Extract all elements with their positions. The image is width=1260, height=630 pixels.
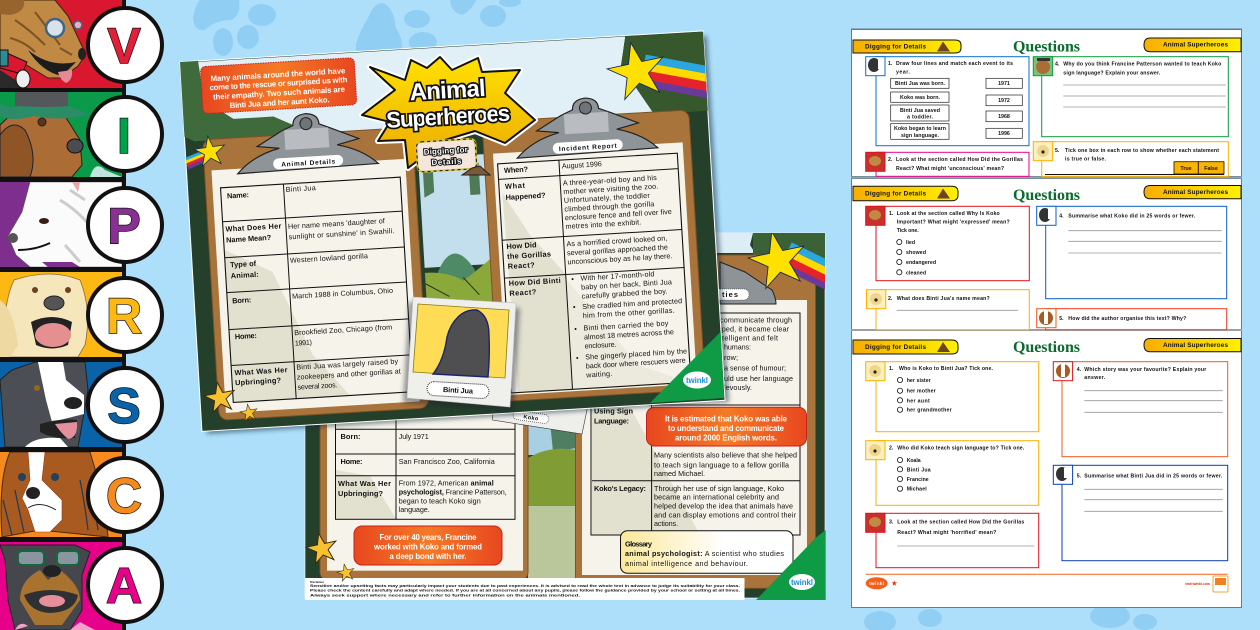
right clipboard <box>481 92 705 402</box>
question 1 matching: sign language. <box>901 133 940 139</box>
intro callout: Binti Jua and her aunt Koko. <box>229 95 330 110</box>
callout: 2000 words <box>646 407 806 446</box>
callout: Francine: a deep bond with her. <box>390 552 466 561</box>
intro callout: their empathy. Two such animals are <box>213 85 346 102</box>
table: incident report: baby on her back, Binti Jua <box>581 277 672 292</box>
question 3: 3. <box>889 520 894 526</box>
rear right clipboard: uld use her language <box>724 374 793 383</box>
table: animal details: Home: <box>235 331 257 341</box>
header: Digging for Details <box>865 344 926 351</box>
question 2: 2. <box>889 446 894 452</box>
rear right clipboard: to teach sign language to a fellow gorilla <box>654 460 789 470</box>
disclaimer strip: Disclaimer <box>310 580 325 584</box>
question 1: showed <box>906 250 926 256</box>
glossary box: animal psychologist: A scientist who studies <box>625 549 784 558</box>
question 1 matching: 1971 <box>998 81 1010 87</box>
table: incident report: Binti then carried the boy <box>583 318 669 333</box>
table: incident report: With her 17-month-old <box>580 269 655 283</box>
question 5: 5. <box>1077 474 1082 480</box>
band A: pink with rottweiler <box>0 542 122 630</box>
question 2 <box>866 152 1029 176</box>
letter circle A: A <box>106 558 142 614</box>
rear right clipboard: levously. <box>724 383 752 392</box>
table: animal details: several zoos. <box>297 380 338 392</box>
letter circle R: R <box>106 288 142 344</box>
question 1: her mother <box>907 389 936 395</box>
question 2: Koala <box>907 458 921 464</box>
question 2: Francine <box>907 477 929 483</box>
rear left clipboard: What Was Her <box>338 479 391 488</box>
question 5: Summarise what Binti Jua did in 25 words or fewer. <box>1084 474 1223 480</box>
band V: red with airedale <box>0 0 122 88</box>
table: incident report: She cradled him and protected <box>582 296 682 311</box>
title: Superheroes <box>386 101 511 133</box>
question 1 matching: a toddler. <box>907 114 934 120</box>
table: incident report: What <box>505 181 526 191</box>
title: Animal <box>409 75 486 106</box>
rear left clipboard: language. <box>399 505 430 514</box>
footer: twinkl <box>869 581 884 586</box>
band P: purple with white dog <box>0 182 122 267</box>
letter circle C: C <box>106 468 142 524</box>
table: animal details: 1991) <box>295 338 312 348</box>
question 1: Tick one. <box>897 228 919 234</box>
table: animal details: zookeepers and other gorillas at <box>297 366 401 382</box>
table: incident report: A three-year-old boy and his <box>563 173 657 187</box>
question 1 <box>866 206 1029 281</box>
question 4: answer. <box>1084 375 1106 381</box>
question 1: endangered <box>906 260 936 266</box>
table: animal details: Name Mean? <box>226 233 272 245</box>
table: incident report: When? <box>504 165 529 175</box>
table: animal details: Western lowland gorilla <box>290 251 368 265</box>
header: Questions <box>1013 187 1080 204</box>
band S: blue with collie <box>0 362 122 447</box>
rear left clipboard: July 1971 <box>399 432 429 441</box>
question 2: React? What might 'unconscious' mean? <box>896 166 1004 172</box>
badge: Digging for Details <box>416 139 477 172</box>
Koko polaroid fragment <box>491 395 590 434</box>
VIPRSCA dog strip <box>0 0 162 630</box>
question 1: her aunt <box>907 398 930 404</box>
clip: animal details <box>234 110 378 174</box>
question 1 matching: 1996 <box>998 131 1010 137</box>
title starburst <box>362 57 535 168</box>
table: incident report: the Gorillas <box>507 249 551 261</box>
label: Abilities tab <box>705 289 749 300</box>
question 4: Why do you think Francine Patterson wanted to teach Koko <box>1063 62 1221 68</box>
letter circle P: P <box>107 198 141 254</box>
rear right clipboard: Many scientists also believe that she helped <box>654 450 797 460</box>
table: animal details: Her name means 'daughter of <box>288 216 385 231</box>
table: animal details <box>221 177 413 402</box>
header: Animal Superheroes <box>1163 42 1228 48</box>
question 1: cleaned <box>906 270 926 276</box>
table: animal details: Binti Jua <box>285 183 316 194</box>
header <box>853 38 1241 56</box>
twinkl corner (front) <box>650 332 724 403</box>
disclaimer strip: Always seek support where necessary and refer to further information on the animals mentioned. <box>310 594 580 598</box>
question 2 <box>866 441 1039 505</box>
callout: Francine <box>354 526 502 565</box>
rear right clipboard: Language: <box>594 416 629 426</box>
footer <box>866 574 1228 592</box>
glossary box: animal intelligence and behaviour. <box>625 559 748 568</box>
question 2 <box>866 290 1029 330</box>
letter circle R <box>88 278 162 352</box>
Koko polaroid fragment: Koko <box>523 414 539 423</box>
footer: visit twinkl.com <box>1185 582 1210 586</box>
question 1 matching: Koko was born. <box>900 95 941 101</box>
question 1 matching: Draw four lines and match each event to its <box>896 61 1013 67</box>
icon: rock <box>462 166 490 175</box>
badge: Digging for Details: Digging for <box>424 145 468 157</box>
callout: Francine: For over 40 years, Francine <box>380 533 477 542</box>
band I: green with bloodhound <box>0 92 122 177</box>
question 2: Michael <box>907 487 927 493</box>
rear left clipboard <box>320 380 528 582</box>
letter circle S <box>88 368 162 442</box>
table: incident report: several gorillas approached the <box>567 242 668 257</box>
table: incident report: mother were visiting the zoo. <box>563 182 658 196</box>
question 4 <box>1053 362 1228 457</box>
rear right clipboard: Through her use of sign language, Koko <box>654 484 784 493</box>
rear right clipboard: named Michael. <box>654 469 705 478</box>
question 2: Who did Koko teach sign language to? Tick one. <box>897 446 1025 452</box>
rear left clipboard: Upbringing? <box>338 489 383 498</box>
callout: 2000 words: to understand and communicate <box>668 424 785 433</box>
question 4 <box>1033 57 1228 137</box>
table: animal details: Name: <box>227 190 249 200</box>
letter circle P <box>88 188 162 262</box>
table: incident report: back door where rescuers were <box>585 356 686 370</box>
table: incident report: August 1996 <box>562 159 602 171</box>
table: incident report: She gingerly placed him by the <box>585 346 687 361</box>
callout: 2000 words: It is estimated that Koko was able <box>665 414 788 424</box>
question 1 matching: Binti Jua was born. <box>895 81 946 87</box>
disclaimer strip: Please check the content carefully and adapt where needed. If you are at all concerned about any pupils, please follow the guidance provided by your school or setting at all times. <box>310 588 740 592</box>
table: incident report: enclosure fence and fell over five <box>565 207 672 222</box>
rear left clipboard: Home: <box>340 457 362 466</box>
twinkl corner (rear) <box>756 530 826 600</box>
table: incident report: him from the other gorillas. <box>582 306 675 320</box>
question 4: 4. <box>1077 367 1082 373</box>
table: incident report: How Did <box>506 240 537 251</box>
rear right clipboard <box>576 255 816 588</box>
question 5: is true or false. <box>1065 156 1107 162</box>
rear left clipboard: From 1972, American animal <box>399 478 494 488</box>
question 4: 4. <box>1055 62 1060 68</box>
question 1 matching: Binti Jua saved <box>900 108 940 114</box>
disclaimer strip <box>305 578 744 600</box>
letter circle I: I <box>117 108 131 164</box>
middle scenery <box>418 154 493 310</box>
question 5: 5. <box>1055 148 1060 154</box>
panel: Binti Jua poster (front) <box>180 31 725 431</box>
question 1: Look at the section called Why Is Koko <box>897 211 1000 217</box>
question 5: True <box>1180 166 1192 172</box>
question 2: Binti Jua <box>907 467 931 473</box>
worksheet 3 (bottom) <box>851 330 1242 608</box>
rear right clipboard: a sense of humour; <box>724 364 786 372</box>
clip: animal details: Animal Details <box>281 158 336 169</box>
icon: top-right rainbow star <box>606 42 707 101</box>
header: Animal Superheroes <box>1163 189 1228 196</box>
question 1 matching <box>866 57 1029 146</box>
icon: rear orange stars <box>304 530 356 582</box>
question 3 <box>866 513 1039 568</box>
callout: 2000 words: around 2000 English words. <box>675 434 777 442</box>
paw print pattern <box>193 0 1157 630</box>
table: incident report: almost 18 metres across the <box>584 327 674 342</box>
letter circle A <box>88 548 162 622</box>
question 5: False <box>1204 166 1218 172</box>
rear right clipboard: Using Sign <box>594 406 633 416</box>
question 3: React? What might 'horrified' mean? <box>897 530 996 536</box>
question 1: Who is Koko to Binti Jua? Tick one. <box>899 366 994 372</box>
table: animal details: Born: <box>232 295 251 305</box>
rear right clipboard: Koko's Legacy: <box>594 484 646 493</box>
intro callout: Many animals around the world have <box>210 66 346 83</box>
glossary box <box>620 531 793 573</box>
question 5: How did the author organise this text? Why? <box>1068 316 1186 322</box>
header: Questions <box>1013 38 1080 56</box>
question 1: her grandmother <box>907 408 952 414</box>
clip: incident report <box>514 94 658 158</box>
question 4: 4. <box>1059 213 1064 219</box>
header <box>853 186 1241 204</box>
question 1 matching: year. <box>896 70 911 76</box>
question 5 <box>1053 465 1228 561</box>
table: incident report: Happened? <box>505 191 546 202</box>
question 4: Summarise what Koko did in 25 words or fewer. <box>1068 213 1196 219</box>
question 2: 2. <box>888 296 893 302</box>
question 1: 1. <box>889 211 894 217</box>
twinkl corner (rear): twinkl <box>791 578 813 587</box>
rear left clipboard: psychologist, Francine Patterson, <box>399 488 507 496</box>
icon: rear rainbow star <box>746 233 825 290</box>
table: animal details: Type of <box>230 259 257 269</box>
table: incident report: metres into the exhibit. <box>565 217 642 231</box>
left clipboard <box>201 107 429 420</box>
black spine <box>122 0 126 630</box>
rear right clipboard: helped develop the idea that animals have <box>654 502 793 510</box>
question 1: lied <box>906 240 915 246</box>
letter circle V <box>88 8 162 82</box>
polaroid: Binti Jua: Binti Jua <box>443 385 474 396</box>
band C: orange with spaniel <box>0 452 122 537</box>
question 1: Important? What might 'expressed' mean? <box>897 220 1010 226</box>
table: animal details: Animal: <box>231 270 259 280</box>
table: incident report <box>498 153 691 393</box>
intro callout <box>200 58 357 114</box>
intro callout: come to the rescue or surprised us with <box>209 75 348 92</box>
question 3: Look at the section called How Did the Gorillas <box>897 520 1024 526</box>
letter circle I <box>88 97 162 171</box>
question 2: What does Binti Jua's name mean? <box>897 296 990 302</box>
clip: incident report: Incident Report <box>559 143 618 153</box>
header: Digging for Details <box>865 44 926 50</box>
table: incident report: unconscious boy as he lay there. <box>567 251 673 266</box>
question 1: her sister <box>907 378 931 384</box>
icon: left rainbow star <box>186 134 227 168</box>
letter circle S: S <box>107 378 141 434</box>
question 5: Tick one box in each row to show whether each statement <box>1065 148 1219 154</box>
question 1 matching: 1968 <box>998 114 1010 120</box>
glossary box: Glossary <box>625 540 653 548</box>
table: animal details: March 1988 in Columbus, Ohio <box>292 286 393 301</box>
rear left clipboard: began to teach Koko sign <box>399 496 481 506</box>
twinkl corner (front): twinkl <box>686 376 708 385</box>
question 5: 5. <box>1059 316 1064 322</box>
polaroid: Binti Jua <box>403 297 520 412</box>
table: incident report: As a horrified crowd looked on, <box>566 233 668 248</box>
header <box>853 338 1241 356</box>
table: incident report: waiting. <box>585 369 612 380</box>
rear right clipboard: communicate through <box>720 316 792 324</box>
table: animal details: Binti Jua was largely raised by <box>296 357 399 372</box>
rear left clipboard: San Francisco Zoo, California <box>399 457 495 466</box>
question 2: Look at the section called How Did the Gorillas <box>896 157 1023 163</box>
rear middle scenery <box>528 400 576 582</box>
rear right clipboard: iped, it became clear <box>720 324 790 334</box>
icon: orange stars <box>202 380 259 422</box>
band R: yellow with golden dog <box>0 272 122 357</box>
header: Digging for Details <box>865 190 926 198</box>
table: incident report: Unfortunately, the toddler <box>564 191 651 205</box>
table: animal details: What Does Her <box>225 221 282 234</box>
label: Abilities tab: ties <box>722 290 738 299</box>
rear right clipboard: humans: <box>724 342 751 352</box>
badge: Digging for Details: Details <box>431 156 462 167</box>
header: Questions <box>1013 339 1080 356</box>
letter circle C <box>88 458 162 532</box>
question 1 <box>866 362 1039 432</box>
rear right clipboard: became an international celebrity and <box>654 492 779 502</box>
dividers <box>0 88 126 542</box>
worksheet 2 (middle) <box>851 178 1242 331</box>
question 4 <box>1037 206 1227 299</box>
icon: gorilla silhouette <box>433 310 489 377</box>
icon: rear clipboard clip <box>720 262 776 304</box>
letter circle V: V <box>107 18 141 74</box>
question 4: sign language? Explain your answer. <box>1063 70 1161 76</box>
table: incident report: How Did Binti <box>508 276 561 288</box>
header: Animal Superheroes <box>1163 342 1228 349</box>
callout: Francine: worked with Koko and formed <box>373 542 482 552</box>
question 4: Which story was your favourite? Explain your <box>1084 367 1206 373</box>
table: incident report: climbed through the gorilla <box>564 199 655 214</box>
table: animal details: sunlight or sunshine' in Swahili. <box>288 226 395 241</box>
table: incident report: carefully grabbed the boy. <box>581 287 668 301</box>
question 5 <box>1033 142 1228 176</box>
poster shadow <box>184 36 729 434</box>
question 1 matching: 1. <box>888 61 893 67</box>
table: incident report: React? <box>509 287 537 298</box>
table: animal details: Brookfield Zoo, Chicago (from <box>294 322 392 337</box>
question 5 <box>1037 309 1227 330</box>
table: incident report: enclosure. <box>584 340 617 350</box>
table: incident report: React? <box>507 260 535 271</box>
sky <box>198 33 694 141</box>
question 1: 1. <box>889 366 894 372</box>
rear right clipboard: telligent and felt <box>722 334 778 342</box>
question 1 matching: 1972 <box>998 98 1010 104</box>
rear right clipboard: and can display emotions and control their <box>654 510 797 520</box>
rear right clipboard: row; <box>724 353 738 362</box>
table: animal details: Upbringing? <box>235 376 282 387</box>
disclaimer strip: Sensitive and/or upsetting facts may particularly impact your students due to past experiences. It is advised to read the whole text in advance to judge its suitability for your class. <box>310 584 740 588</box>
question 1 matching: Koko began to learn <box>894 126 946 132</box>
worksheet 1 (top) <box>851 28 1242 178</box>
question 2: 2. <box>888 157 893 163</box>
panel: Koko poster (behind) <box>304 226 835 600</box>
table: animal details: What Was Her <box>234 365 288 377</box>
title <box>384 74 511 133</box>
rear left clipboard: Born: <box>340 432 360 441</box>
rear right clipboard: actions. <box>654 519 678 528</box>
